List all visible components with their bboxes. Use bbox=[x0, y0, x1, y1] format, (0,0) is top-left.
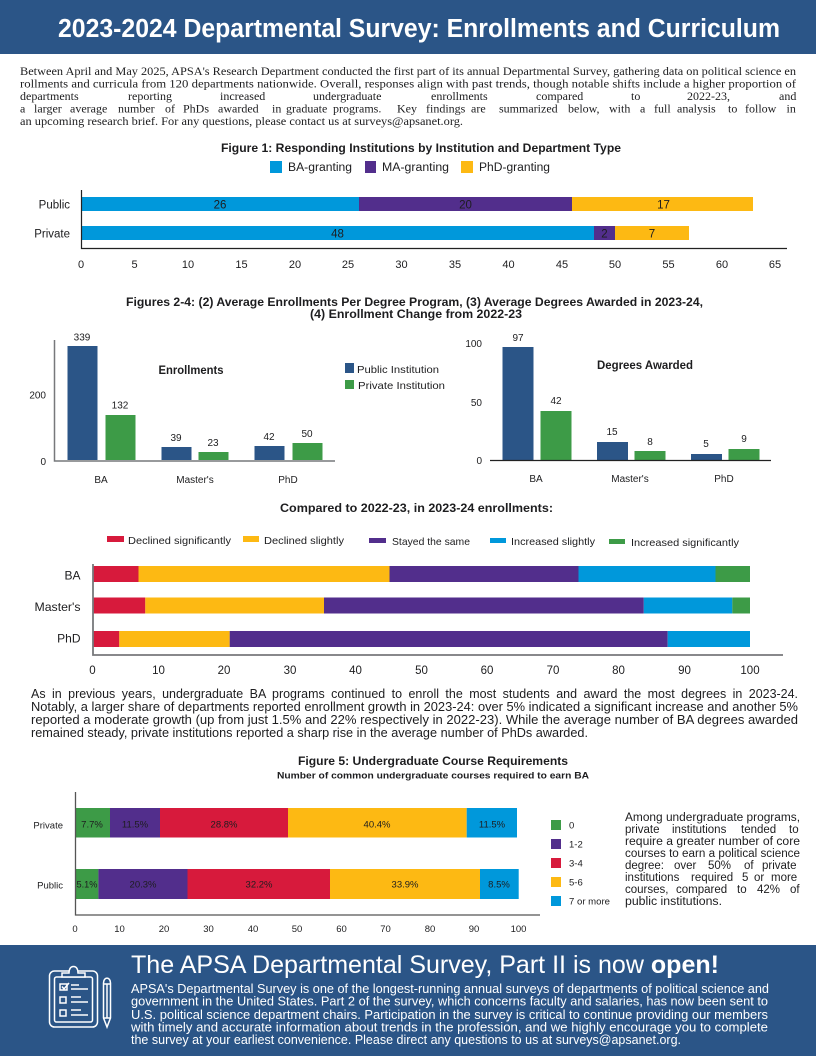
figure 1 stacked bars: 7 bbox=[649, 228, 655, 240]
bar chart: degrees awarded: Master's bbox=[611, 474, 649, 485]
bar chart: degrees awarded: 5 bbox=[703, 439, 709, 450]
figure 1 stacked bars bbox=[34, 190, 787, 271]
intro text block: full bbox=[654, 102, 671, 116]
sidebar text: private bbox=[625, 824, 660, 836]
footer banner bbox=[0, 945, 816, 1056]
figure 5 stacked bars: 80 bbox=[425, 924, 435, 935]
intro text block: graduate bbox=[286, 102, 327, 116]
footer body text: government in the United States. Part 2 of the survey, which concerns faculty and salaries, has now been sent to bbox=[131, 994, 768, 1008]
figure 1 stacked bars: 20 bbox=[459, 200, 472, 212]
figure 1 stacked bars: 55 bbox=[662, 259, 675, 271]
figure 1 stacked bars: 45 bbox=[556, 259, 568, 271]
figure 1 stacked bars: 30 bbox=[395, 259, 408, 271]
figure 5 legend: 0 bbox=[569, 820, 574, 832]
figure 4 stacked bars: 50 bbox=[415, 665, 428, 677]
figure 5 stacked bars: 8.5% bbox=[488, 880, 510, 890]
sidebar text: public institutions. bbox=[625, 896, 722, 908]
findings paragraph: remained steady, private institutions reported a sharp rise in the average number of PhDs awarded. bbox=[31, 726, 588, 740]
figure 5 stacked bars: 100 bbox=[511, 924, 526, 935]
figure 5 stacked bars: 11.5% bbox=[122, 820, 149, 830]
intro text block: compared bbox=[536, 89, 583, 103]
figure 5 stacked bars bbox=[33, 792, 540, 935]
figure 4 legend bbox=[107, 535, 740, 549]
figure 1 stacked bars: 5 bbox=[131, 259, 138, 271]
bar chart: degrees awarded bbox=[465, 333, 771, 485]
title: 2023-2024 Departmental Survey: Enrollments and Curriculum bbox=[58, 15, 780, 43]
figure 4 stacked bars bbox=[34, 564, 783, 677]
intro text block: to bbox=[631, 89, 640, 103]
sidebar text: 5 bbox=[742, 872, 748, 884]
bar chart: enrollments: 23 bbox=[207, 438, 219, 449]
sidebar text: to bbox=[789, 824, 799, 836]
intro text block: are bbox=[471, 102, 486, 116]
figure 1 stacked bars: Public bbox=[39, 200, 70, 212]
sidebar text: 50% bbox=[708, 860, 731, 872]
sidebar text: over bbox=[674, 860, 697, 872]
bar chart: enrollments: 0 bbox=[40, 457, 46, 468]
figure 5 stacked bars: Private bbox=[33, 820, 63, 832]
figure 1 legend: MA-granting bbox=[382, 162, 449, 174]
figure 5 legend bbox=[551, 820, 610, 908]
figure 5: course requirements bbox=[33, 756, 610, 935]
sidebar text: private bbox=[762, 860, 797, 872]
figure 5 stacked bars: 28.8% bbox=[211, 820, 238, 830]
sidebar text: to bbox=[737, 884, 747, 896]
bar chart: enrollments: 200 bbox=[29, 390, 46, 402]
intro text block: an upcoming research brief. For any questions, please contact us at surveys@apsanet.org. bbox=[20, 114, 463, 128]
figure 4 heading: Compared to 2022-23, in 2023-24 enrollments: bbox=[280, 503, 553, 515]
bar chart: enrollments: Master's bbox=[176, 475, 214, 486]
intro text block: larger bbox=[34, 102, 62, 116]
figure 1 stacked bars: 26 bbox=[214, 200, 226, 212]
figure 1: responding institutions bbox=[34, 143, 787, 271]
findings paragraph: reported a moderate growth (up from just 1.5% and 22% respectively in 2022-23). While the average number of BA degrees awarded bbox=[31, 713, 798, 727]
bar chart: enrollments: BA bbox=[94, 475, 108, 486]
figure 5 stacked bars: 20.3% bbox=[130, 880, 157, 890]
figures 2-4 heading bbox=[126, 297, 703, 321]
figure 1 stacked bars: 50 bbox=[609, 259, 621, 271]
footer body text: U.S. political science department chairs. Participation in the survey is critical to continue providing our members bbox=[131, 1008, 768, 1022]
intro text block: a bbox=[20, 102, 26, 116]
figure 4 stacked bars: 100 bbox=[740, 665, 760, 677]
figure 5 stacked bars: 33.9% bbox=[392, 880, 419, 890]
figure 4: enrollment change bbox=[34, 503, 783, 677]
intro text block: findings bbox=[426, 102, 466, 116]
figure 4 stacked bars: Master's bbox=[34, 600, 80, 614]
figure 1 legend bbox=[270, 161, 550, 174]
figure 5 heading: Figure 5: Undergraduate Course Requirements bbox=[298, 756, 568, 768]
figure 4 legend: Declined significantly bbox=[128, 535, 232, 547]
findings paragraph: As in previous years, undergraduate BA programs continued to enroll the most students and award the most degrees in 2023-24. bbox=[31, 687, 798, 701]
figure 1 stacked bars: 20 bbox=[289, 259, 301, 271]
bar chart: degrees awarded: 8 bbox=[647, 437, 653, 448]
intro text block: rollments and curricula from 120 departments nationwide. Overall, responses align with past trends, though notable shifts include a higher proportion of bbox=[20, 76, 796, 90]
figure 5 stacked bars: 30 bbox=[203, 924, 214, 935]
intro text block: in bbox=[786, 102, 796, 116]
intro text block: 2022-23, bbox=[687, 89, 730, 103]
intro text block: PhDs bbox=[183, 102, 209, 116]
figure 5 stacked bars: 5.1% bbox=[76, 880, 98, 890]
figure 4 legend: Declined slightly bbox=[264, 535, 345, 547]
bar chart: degrees awarded: 42 bbox=[550, 396, 562, 407]
figure 5 stacked bars: Public bbox=[37, 880, 63, 892]
bar chart: enrollments: 50 bbox=[301, 429, 313, 440]
sidebar text: 42% bbox=[757, 884, 780, 896]
sidebar text: compared bbox=[676, 884, 727, 896]
header banner bbox=[0, 0, 816, 54]
figure 1 legend: PhD-granting bbox=[479, 162, 550, 174]
sidebar text: degree: bbox=[625, 860, 664, 872]
figure 1 stacked bars: 48 bbox=[331, 228, 344, 240]
figure 4 stacked bars: 80 bbox=[612, 665, 625, 677]
bar chart: degrees awarded: 97 bbox=[512, 333, 524, 344]
figure 5 legend: 3-4 bbox=[569, 858, 583, 870]
figure 1 stacked bars: 35 bbox=[449, 259, 461, 271]
figure 1 stacked bars: 25 bbox=[342, 259, 354, 271]
intro text block: awarded bbox=[218, 102, 259, 116]
intro text block: of bbox=[165, 102, 175, 116]
figure 4 stacked bars: 0 bbox=[89, 665, 96, 677]
sidebar text: of bbox=[744, 860, 754, 872]
figure 4 stacked bars: 10 bbox=[152, 665, 165, 677]
figure 4 stacked bars: 70 bbox=[547, 665, 559, 677]
bar chart: degrees awarded: 15 bbox=[606, 427, 618, 438]
intro text block: increased bbox=[220, 89, 265, 103]
sidebar text: or bbox=[754, 872, 764, 884]
intro text block: analysis bbox=[677, 102, 716, 116]
figure 5 stacked bars: 70 bbox=[380, 924, 391, 935]
bar chart: degrees awarded: 100 bbox=[465, 339, 482, 350]
intro text block: departments bbox=[20, 89, 79, 103]
figure 1 stacked bars: 10 bbox=[182, 259, 194, 271]
figure 5 stacked bars: 60 bbox=[336, 924, 347, 935]
intro text block: Between April and May 2025, APSA's Research Department conducted the first part of its annual Departmental Survey, gathering data on political science en bbox=[20, 64, 796, 78]
bar chart: enrollments: PhD bbox=[278, 475, 298, 486]
figure 5 subheading: Number of common undergraduate courses required to earn BA bbox=[277, 770, 589, 782]
institution legend: Public Institution bbox=[357, 364, 439, 376]
figures 2-4 heading: (4) Enrollment Change from 2022-23 bbox=[310, 309, 522, 321]
sidebar text: required bbox=[691, 872, 733, 884]
figure 5 stacked bars: 0 bbox=[72, 924, 78, 935]
figure 1 heading: Figure 1: Responding Institutions by Institution and Department Type bbox=[221, 143, 621, 155]
footer heading: The APSA Departmental Survey, Part II is now open! bbox=[131, 951, 719, 979]
intro text block: average bbox=[70, 102, 107, 116]
intro text block: and bbox=[779, 89, 796, 103]
figure 4 stacked bars: 90 bbox=[678, 665, 691, 677]
intro text block: reporting bbox=[128, 89, 172, 103]
figure 1 stacked bars: 60 bbox=[716, 259, 728, 271]
figure 5 stacked bars: 90 bbox=[469, 924, 479, 935]
figure 5 stacked bars: 32.2% bbox=[246, 880, 273, 890]
sidebar text: courses to earn a political science bbox=[625, 848, 800, 860]
figure 5 stacked bars: 10 bbox=[114, 924, 125, 935]
bar chart: degrees awarded: PhD bbox=[714, 474, 734, 485]
figure 4 stacked bars: PhD bbox=[57, 632, 81, 646]
intro text block: with bbox=[609, 102, 630, 116]
intro text block: a bbox=[640, 102, 646, 116]
bar chart: enrollments bbox=[29, 332, 445, 486]
sidebar text: institutions bbox=[672, 824, 727, 836]
findings paragraph bbox=[31, 687, 798, 740]
degrees chart title: Degrees Awarded bbox=[597, 360, 693, 372]
sidebar text: require a greater number of core bbox=[625, 836, 800, 848]
intro text block bbox=[20, 64, 796, 128]
figure 5 stacked bars: 40.4% bbox=[364, 820, 391, 830]
intro text block: enrollments bbox=[431, 89, 488, 103]
bar chart: enrollments: 339 bbox=[74, 332, 91, 344]
footer body text: with timely and accurate information about trends in the profession, and we highly encourage you to complete bbox=[130, 1020, 768, 1034]
bar chart: degrees awarded: 0 bbox=[476, 456, 482, 467]
figure 4 stacked bars: 40 bbox=[349, 665, 362, 677]
figure 5 legend: 1-2 bbox=[569, 840, 583, 850]
sidebar text bbox=[625, 812, 800, 908]
icon: clipboard and pencil bbox=[50, 966, 110, 1027]
figure 1 stacked bars: 40 bbox=[502, 259, 515, 271]
bar chart: enrollments: 132 bbox=[112, 400, 129, 412]
figure 5 legend: 7 or more bbox=[569, 896, 610, 908]
figure 5 stacked bars: 20 bbox=[159, 924, 169, 935]
bar chart: enrollments: 42 bbox=[263, 432, 275, 443]
figures 2-4 heading: Figures 2-4: (2) Average Enrollments Per Degree Program, (3) Average Degrees Awarded in 2023-24, bbox=[126, 297, 703, 309]
footer body text bbox=[130, 982, 769, 1047]
findings paragraph: Notably, a larger share of departments reported enrollment growth in 2023-24: over 5% indicated a significant increase and another 5% bbox=[31, 700, 798, 714]
sidebar text: tended bbox=[741, 824, 776, 836]
sidebar text: more bbox=[771, 872, 797, 884]
figure 4 stacked bars: 30 bbox=[284, 665, 296, 677]
sidebar text: institutions bbox=[625, 872, 680, 884]
figure 5 stacked bars: 11.5% bbox=[479, 820, 506, 830]
figure 4 stacked bars: 20 bbox=[218, 665, 230, 677]
figure 4 legend: Stayed the same bbox=[392, 536, 470, 548]
intro text block: summarized bbox=[499, 102, 558, 116]
intro text block: in bbox=[272, 102, 281, 116]
footer body text: the survey at your earliest convenience. Please direct any questions to us at surveys@apsanet.org. bbox=[131, 1033, 681, 1047]
figure 1 legend: BA-granting bbox=[288, 162, 352, 174]
figure 1 stacked bars: Private bbox=[34, 228, 70, 240]
sidebar text: Among undergraduate programs, bbox=[625, 812, 800, 824]
intro text block: below, bbox=[568, 102, 600, 116]
figure 1 stacked bars: 2 bbox=[601, 228, 608, 240]
figure 5 stacked bars: 40 bbox=[248, 924, 258, 935]
figure 5 stacked bars: 7.7% bbox=[81, 820, 103, 830]
footer body text: APSA's Departmental Survey is one of the longest-running annual surveys of departments of political science and bbox=[131, 982, 769, 996]
sidebar text: of bbox=[790, 884, 800, 896]
figure 4 stacked bars: 60 bbox=[481, 665, 493, 677]
bar chart: degrees awarded: 50 bbox=[471, 398, 482, 409]
intro text block: programs. bbox=[333, 102, 381, 116]
figure 1 stacked bars: 0 bbox=[78, 259, 84, 271]
enrollments chart title: Enrollments bbox=[158, 365, 224, 377]
institution legend: Private Institution bbox=[358, 380, 445, 392]
bar chart: degrees awarded: 9 bbox=[741, 434, 747, 445]
institution legend bbox=[345, 363, 445, 392]
figure 1 stacked bars: 17 bbox=[657, 200, 670, 212]
intro text block: number bbox=[118, 102, 155, 116]
bar chart: enrollments: 39 bbox=[170, 433, 182, 444]
intro text block: follow bbox=[745, 102, 777, 116]
figure 5 legend: 5-6 bbox=[569, 878, 583, 888]
bar chart: degrees awarded: BA bbox=[529, 474, 543, 485]
intro text block: Key bbox=[397, 102, 417, 116]
figure 4 legend: Increased slightly bbox=[511, 536, 596, 548]
figure 1 stacked bars: 15 bbox=[235, 259, 248, 271]
figure 1 stacked bars: 65 bbox=[769, 259, 781, 271]
sidebar text: courses, bbox=[625, 884, 668, 896]
intro text block: undergraduate bbox=[313, 89, 381, 103]
intro text block: to bbox=[728, 102, 737, 116]
figure 4 stacked bars: BA bbox=[64, 568, 80, 582]
figure 4 legend: Increased significantly bbox=[631, 537, 740, 549]
figure 5 stacked bars: 50 bbox=[292, 924, 302, 935]
